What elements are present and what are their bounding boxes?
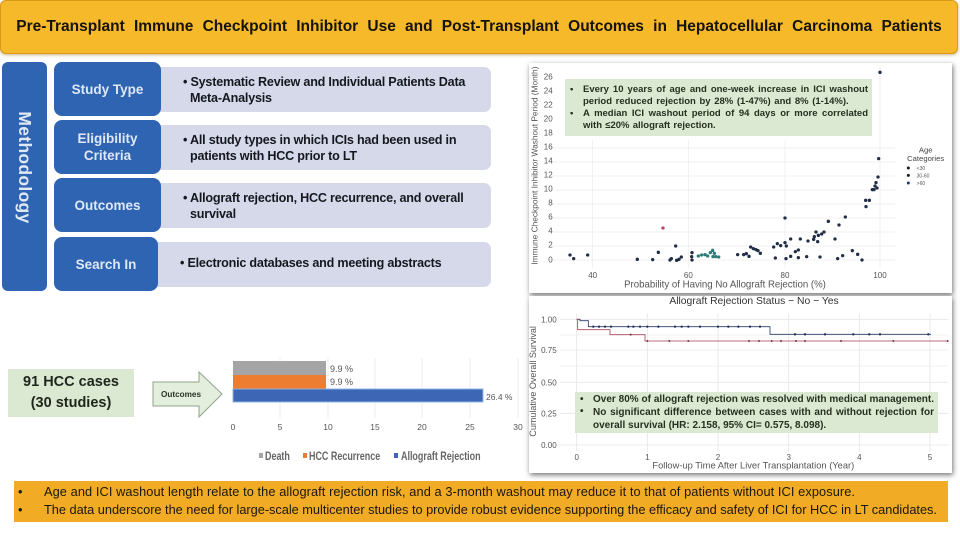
callout: washout findings: Every 10 years of age and one-week increase in ICI washout [583, 84, 868, 95]
callout: survival findings: • [580, 406, 584, 417]
callout: survival findings [575, 392, 938, 433]
scatter plot: Immune Checkpoint Inhibitor Washout Period (Month) [530, 66, 540, 265]
legend: age categories: >60 [917, 181, 925, 187]
legend: age categories: Age [919, 146, 932, 155]
legend: age categories: 30-60 [917, 173, 930, 179]
bar chart: outcomes: 9.9 % [330, 377, 353, 387]
survival curve chart: 4 [857, 453, 862, 462]
title [0, 0, 958, 54]
survival curve chart: Follow-up Time After Liver Transplantation (Year) [652, 461, 854, 471]
row: eligibility description [150, 125, 491, 170]
row: outcomes description: • Allograft rejection, HCC recurrence, and overall [183, 191, 464, 205]
scatter plot: 4 [548, 227, 553, 236]
bar chart: outcomes: 9.9 % [330, 364, 353, 374]
title: Pre-Transplant Immune Checkpoint Inhibitor Use and Post-Transplant Outcomes in Hepatocellular Carcinoma Patients [16, 18, 942, 35]
scatter plot: 22 [544, 101, 553, 110]
bar chart: outcomes: 30 [513, 422, 523, 432]
row label: eligibility criteria: Eligibility [77, 131, 138, 146]
callout: survival findings: overall survival (HR: 2.158, 95% CI= 0.575, 8.098). [593, 420, 826, 431]
row label: eligibility criteria [54, 120, 161, 174]
scatter plot: 24 [544, 87, 553, 96]
survival curve chart: 5 [928, 453, 933, 462]
scatter plot: 6 [548, 213, 553, 222]
row label: eligibility criteria: Criteria [84, 148, 131, 163]
bar chart: outcomes: 26.4 % [486, 392, 513, 402]
scatter plot: 26 [544, 73, 553, 82]
vertical heading: Methodology [2, 62, 47, 291]
scatter plot [530, 66, 944, 290]
row: search description: • Electronic databases and meeting abstracts [180, 256, 441, 270]
callout: washout findings: • [570, 108, 573, 119]
conclusions banner: Age and ICI washout length relate to the allograft rejection risk, and a 3-month washout may reduce it to that of patients without ICI exposure. [44, 484, 855, 499]
callout: survival findings: Over 80% of allograft rejection was resolved with medical management. [593, 394, 934, 405]
callout: washout findings: period reduced rejection by 28% (1-47%) and 8% (1-14%). [583, 96, 849, 107]
bar chart: outcomes: 15 [370, 422, 380, 432]
legend: age categories: Categories [907, 154, 944, 163]
row label: outcomes [54, 178, 161, 232]
callout: washout findings: A median ICI washout period of 94 days or more correlated [583, 108, 868, 119]
curve: rejection [577, 319, 948, 341]
bar chart: outcomes: HCC Recurrence [309, 451, 380, 463]
row label: search in [54, 237, 158, 291]
row: study type description: • Systematic Review and Individual Patients Data [183, 75, 465, 89]
row: eligibility description: patients with HCC prior to LT [190, 149, 357, 163]
scatter plot: 12 [544, 171, 553, 180]
scatter plot: 100 [873, 271, 887, 280]
row: search description [150, 242, 491, 287]
row label: study type: Study Type [72, 82, 143, 96]
bar chart: outcomes: 0 [231, 422, 236, 432]
scatter plot: 10 [544, 185, 553, 194]
row label: search in: Search In [76, 256, 136, 272]
callout: survival findings: No significant difference between cases with and without rejection for [593, 407, 934, 418]
callout: washout findings: • [570, 84, 573, 95]
scatter plot: 60 [684, 271, 693, 280]
row: study type description: Meta-Analysis [190, 91, 272, 105]
callout: washout findings [565, 79, 872, 136]
survival curve chart: 1.00 [541, 315, 557, 324]
bar chart: outcomes: Allograft Rejection [401, 451, 481, 463]
survival curve chart: 0.25 [541, 409, 557, 418]
bar chart: outcomes: 5 [278, 422, 283, 432]
survival curve chart: 3 [786, 453, 791, 462]
survival curve chart: 0.00 [541, 441, 557, 450]
scatter plot: Probability of Having No Allograft Rejection (%) [624, 279, 826, 290]
arrow: outcomes: Outcomes [161, 390, 201, 399]
callout: case count [8, 369, 134, 417]
scatter plot: 40 [588, 271, 598, 280]
scatter plot: 80 [781, 271, 790, 280]
panel: survival card [529, 296, 952, 473]
conclusions banner [14, 481, 948, 522]
row label: study type [54, 62, 161, 116]
survival curve chart: 2 [716, 453, 721, 462]
survival curve chart: Cumulative Overall Survival [528, 326, 538, 437]
scatter plot: 2 [548, 241, 553, 250]
survival curve chart [528, 296, 949, 471]
row: eligibility description: • All study types in which ICIs had been used in [183, 133, 456, 147]
conclusions banner: The data underscore the need for large-scale multicenter studies to provide robust evidence supporting the efficacy and safety of ICI for HCC in LT candidates. [44, 502, 937, 517]
scatter plot: 8 [548, 199, 553, 208]
scatter plot: 0 [548, 256, 553, 265]
panel: methodology [2, 62, 491, 291]
survival curve chart: 0 [574, 453, 579, 462]
callout: washout findings: with ≤20% allograft rejection. [583, 120, 716, 131]
bar chart: outcomes: Death [265, 451, 290, 463]
conclusions banner: • [18, 502, 22, 517]
scatter plot: 18 [544, 129, 553, 138]
legend: age categories [907, 146, 944, 187]
legend: age categories: <30 [917, 166, 925, 172]
row: outcomes description: survival [190, 207, 236, 221]
scatter plot: 20 [544, 115, 553, 124]
vertical heading: Methodology: Methodology [15, 111, 35, 224]
bar chart: outcomes: 10 [323, 422, 333, 432]
callout: survival findings: • [580, 394, 584, 405]
bar chart: outcomes: 20 [417, 422, 427, 432]
survival curve chart: Allograft Rejection Status − No − Yes [669, 296, 839, 307]
panel: scatter plot card [529, 63, 952, 293]
curve: no rejection [577, 319, 931, 334]
conclusions banner: • [18, 484, 22, 499]
scatter plot: 14 [544, 157, 553, 166]
row: study type description [150, 67, 491, 112]
bar chart: outcomes: 25 [465, 422, 475, 432]
callout: case count: 91 HCC cases [23, 374, 119, 390]
survival curve chart: 0.50 [541, 378, 557, 387]
survival curve chart: 0.75 [541, 346, 557, 355]
row label: outcomes: Outcomes [74, 198, 141, 212]
arrow: outcomes [152, 371, 223, 418]
scatter plot: 16 [544, 143, 553, 152]
callout: case count: (30 studies) [31, 395, 111, 411]
survival curve chart: 1 [645, 453, 650, 462]
row: outcomes description [150, 183, 491, 228]
bar chart: outcomes [231, 358, 523, 463]
